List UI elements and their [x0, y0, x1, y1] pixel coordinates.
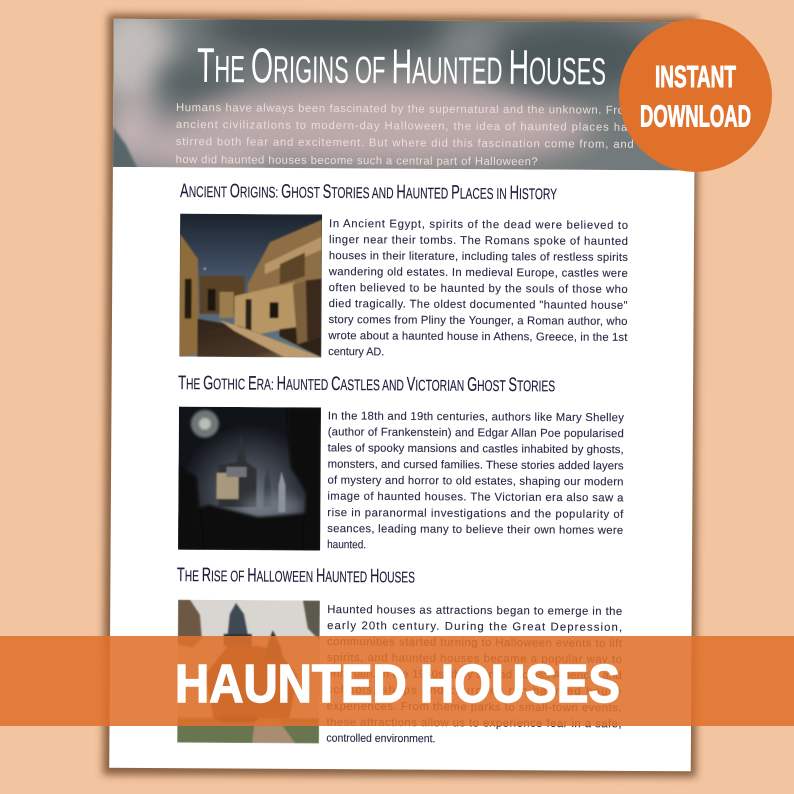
intro paragraph [176, 102, 634, 169]
paragraph: ancient origins [327, 218, 629, 360]
image: gothic castle under moon [178, 406, 321, 550]
badge: instant download: INSTANT [655, 59, 736, 94]
paragraph: ancient origins: wrote about a haunted house in Athens, Greece, in the 1st [327, 330, 628, 344]
intro paragraph: Humans have always been fascinated by the supernatural and the unknown. From [176, 102, 634, 117]
banner: haunted houses [0, 636, 794, 726]
paragraph: ancient origins: In Ancient Egypt, spirits of the dead were believed to [329, 218, 628, 232]
paragraph: rise of halloween haunted houses: controlled environment. [326, 733, 435, 745]
sheet paper [109, 19, 695, 771]
heading: gothic era: THE GOTHIC ERA: HAUNTED CASTLES AND VICTORIAN GHOST STORIES [178, 372, 555, 396]
paragraph: rise of halloween haunted houses: spirits, and haunted houses became a popular way to [327, 652, 622, 666]
paragraph: gothic era: image of haunted houses. The Victorian era also saw a [327, 491, 624, 504]
header sky panel [112, 18, 680, 170]
document sheet [86, 0, 695, 771]
paragraph: ancient origins: century AD. [328, 346, 384, 358]
paragraph: gothic era: rise in paranormal investigations and the popularity of [327, 507, 624, 521]
paragraph: rise of halloween haunted houses [326, 604, 623, 746]
title: THE ORIGINS OF HAUNTED HOUSES [197, 39, 606, 95]
paragraph: gothic era: (author of Frankenstein) and Edgar Allan Poe popularised [328, 426, 624, 440]
sheet shadow [103, 14, 698, 777]
paragraph: rise of halloween haunted houses: schools, shops and churches ran haunted house [327, 684, 622, 698]
paragraph: gothic era: In the 18th and 19th centuries, authors like Mary Shelley [328, 410, 624, 424]
paragraph: gothic era: haunted. [327, 539, 366, 551]
banner: haunted houses: HAUNTED HOUSES [175, 654, 620, 714]
paragraph: ancient origins: linger near their tombs. The Romans spoke of haunted [329, 234, 628, 248]
image: victorian haunted house [177, 600, 320, 744]
paragraph: ancient origins: died tragically. The oldest documented "haunted house" [329, 298, 628, 312]
badge: instant download [619, 19, 772, 172]
paragraph: rise of halloween haunted houses: Haunted houses as attractions began to emerge in the [327, 604, 622, 618]
paragraph: gothic era: monsters, and cursed families. These stories added layers [328, 459, 624, 472]
intro paragraph: how did haunted houses become such a central part of Halloween? [176, 154, 538, 168]
paragraph: ancient origins: often believed to be haunted by the souls of those who [329, 282, 628, 296]
paragraph: gothic era: seances, leading many to believe their own homes were [327, 523, 623, 537]
intro paragraph: stirred both fear and excitement. But where did this fascination come from, and [176, 136, 634, 151]
paragraph: rise of halloween haunted houses: entertain. In the 1950s, they spread across America, and [327, 668, 622, 682]
image: ancient egyptian street at night [179, 214, 322, 358]
paragraph: ancient origins: wandering old estates. In medieval Europe, castles were [328, 266, 628, 280]
heading: ancient origins: ANCIENT ORIGINS: GHOST STORIES AND HAUNTED PLACES IN HISTORY [180, 180, 557, 204]
paragraph: gothic era: tales of spooky mansions and castles inhabited by ghosts, [328, 442, 624, 456]
paragraph: rise of halloween haunted houses: early 20th century. During the Great Depression, [327, 620, 622, 634]
paragraph: gothic era [327, 410, 625, 553]
intro paragraph: ancient civilizations to modern-day Halloween, the idea of haunted places has [176, 119, 634, 134]
paragraph: gothic era: of mystery and horror to old estates, shaping our modern [327, 475, 624, 488]
paragraph: ancient origins: story comes from Pliny the Younger, a Roman author, who [328, 314, 628, 328]
paragraph: rise of halloween haunted houses: communities started turning to Halloween events to lift [327, 636, 623, 650]
heading: rise of halloween haunted houses: THE RISE OF HALLOWEEN HAUNTED HOUSES [177, 564, 415, 587]
paragraph: rise of halloween haunted houses: these attractions allow us to experience fear in a safe, [326, 717, 622, 730]
paragraph: rise of halloween haunted houses: experiences. From theme parks to small-town events, [327, 701, 622, 714]
paragraph: ancient origins: houses in their literature, including tales of restless spirits [329, 250, 628, 264]
